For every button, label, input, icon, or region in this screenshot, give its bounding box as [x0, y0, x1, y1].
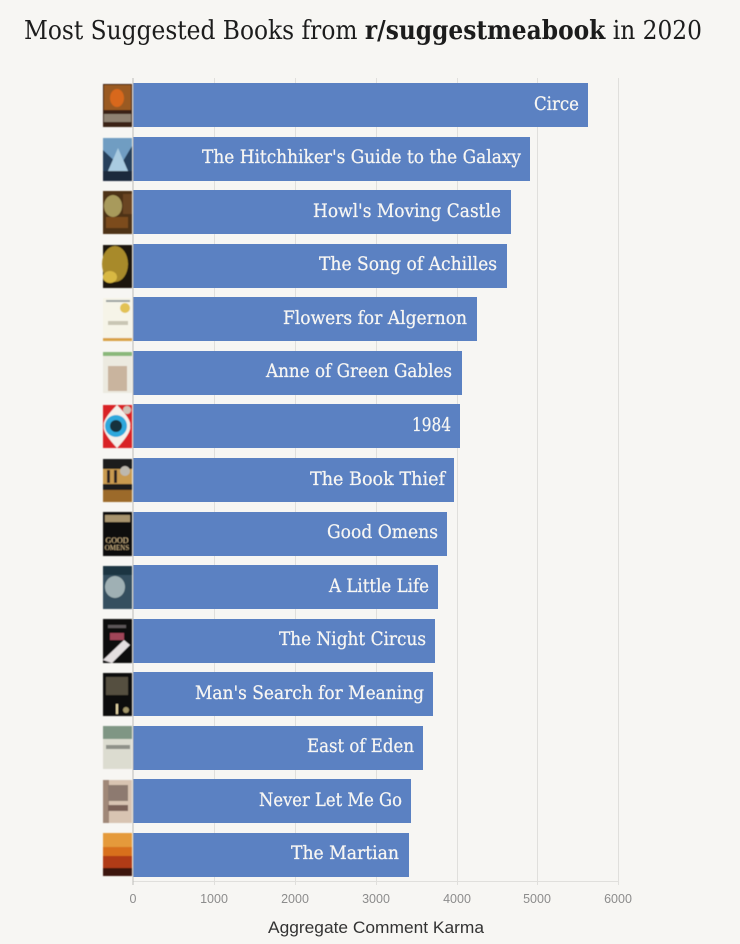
x-axis tick labels: 6000: [604, 892, 632, 906]
x-axis tick labels: 3000: [362, 892, 390, 906]
icon: Good Omens cover: GOOD: [105, 536, 129, 545]
icon: A Little Life cover: [103, 566, 132, 609]
bar: The Hitchhiker's Guide to the Galaxy: [133, 137, 530, 181]
x-axis title: Aggregate Comment Karma: [268, 918, 485, 937]
bar chart: [133, 83, 588, 877]
bar: East of Eden: East of Eden: [307, 735, 414, 757]
bar: Good Omens: Good Omens: [327, 521, 438, 543]
icon: Anne of Green Gables cover: [103, 352, 132, 393]
bar: The Hitchhiker's Guide to the Galaxy: The Hitchhiker's Guide to the Galaxy: [202, 146, 521, 168]
bar: Anne of Green Gables: [133, 351, 462, 395]
bar: The Martian: [133, 833, 409, 877]
bar: The Night Circus: [133, 619, 435, 663]
x-axis tick labels: 2000: [281, 892, 309, 906]
icon: Good Omens cover: OMENS: [105, 544, 129, 552]
bar: The Song of Achilles: The Song of Achilles: [319, 253, 497, 275]
icon: Circe cover: [103, 84, 132, 127]
icon: Flowers for Algernon cover: [103, 298, 132, 341]
bar: The Night Circus: The Night Circus: [279, 628, 426, 650]
bar: 1984: [133, 404, 460, 448]
icon: The Book Thief cover: [103, 459, 132, 502]
bar: Flowers for Algernon: [133, 297, 477, 341]
title: Most Suggested Books from r/suggestmeabook in 2020: [24, 16, 702, 46]
bar: Howl's Moving Castle: Howl's Moving Castle: [313, 200, 501, 222]
x-axis tick labels: [130, 892, 632, 906]
bar: East of Eden: [133, 726, 423, 770]
x-axis tick labels: 0: [130, 892, 137, 906]
bar: Man's Search for Meaning: [133, 672, 433, 716]
icon: 1984 cover: [103, 405, 132, 448]
icon: Man's Search for Meaning cover: [103, 673, 132, 716]
bar: Man's Search for Meaning: Man's Search for Meaning: [195, 682, 424, 704]
bar: A Little Life: A Little Life: [328, 575, 429, 597]
icon: Hitchhiker's Guide cover: [103, 138, 132, 181]
icon: Never Let Me Go cover: [103, 780, 132, 823]
x-axis tick labels: 5000: [523, 892, 551, 906]
bar: Howl's Moving Castle: [133, 190, 511, 234]
bar: Good Omens: [133, 512, 447, 556]
x-axis tick labels: 4000: [443, 892, 471, 906]
icon: The Night Circus cover: [103, 619, 132, 663]
bar: Never Let Me Go: [133, 779, 411, 823]
bar: A Little Life: [133, 565, 438, 609]
bar: Flowers for Algernon: Flowers for Algernon: [283, 307, 467, 329]
icon: East of Eden cover: [103, 726, 132, 769]
bar: Never Let Me Go: Never Let Me Go: [259, 789, 402, 811]
icon: The Song of Achilles cover: [102, 245, 132, 288]
bar: Circe: [133, 83, 588, 127]
bar: The Book Thief: The Book Thief: [310, 468, 447, 490]
bar: The Song of Achilles: [133, 244, 507, 288]
bar: The Book Thief: [133, 458, 454, 502]
bar: Anne of Green Gables: Anne of Green Gables: [265, 360, 452, 382]
icon: The Martian cover: [103, 833, 132, 876]
bar: The Martian: The Martian: [291, 842, 399, 864]
bar: 1984: 1984: [412, 414, 451, 436]
icon: Good Omens cover: [103, 512, 132, 556]
icon: Howl's Moving Castle cover: [103, 191, 132, 234]
bar: Circe: Circe: [534, 93, 579, 115]
x-axis tick labels: 1000: [200, 892, 228, 906]
